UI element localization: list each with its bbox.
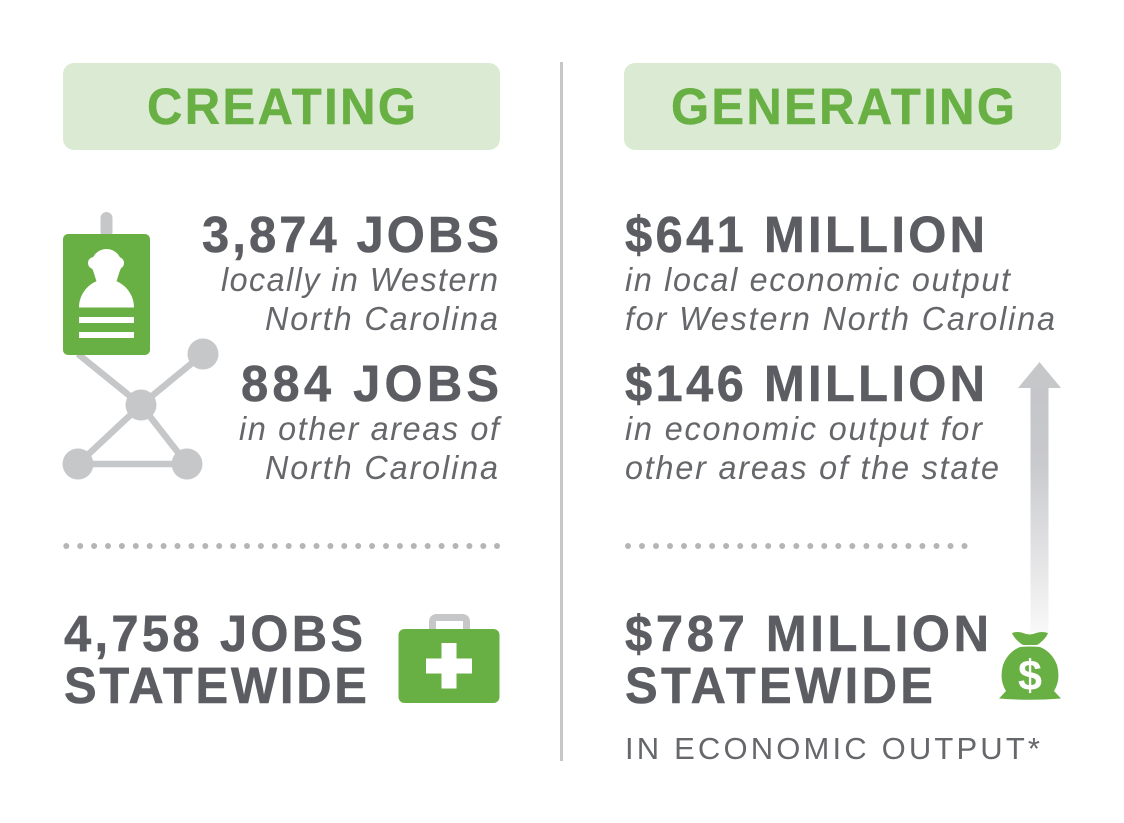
stat: $641 million: in local economic output (625, 261, 1012, 298)
heading: generating: GENERATING (671, 78, 1015, 135)
stat: statewide jobs: 4,758 JOBS (64, 605, 363, 662)
dotted separator (625, 543, 968, 549)
dotted separator (63, 543, 500, 549)
icon: first aid kit (398, 618, 500, 703)
stat: $146 million (625, 355, 999, 486)
icon: money bag: $ (1018, 652, 1042, 700)
icon: id badge (63, 212, 150, 355)
stat: $146 million: in economic output for (625, 410, 983, 447)
stat: statewide jobs (64, 605, 367, 714)
stat: $641 million (625, 206, 1055, 337)
stat: 3,874 jobs: locally in Western (221, 261, 498, 298)
stat: statewide output (625, 605, 1040, 766)
stat: 884 jobs: in other areas of (239, 410, 502, 447)
stat: $641 million: $641 MILLION (625, 206, 985, 263)
stat: 3,874 jobs: North Carolina (265, 300, 498, 337)
stat: statewide output: $787 MILLION (625, 605, 989, 662)
icon: money bag (999, 632, 1061, 700)
arrow: growth (1018, 362, 1061, 632)
stat: $641 million: for Western North Carolina (625, 300, 1055, 337)
stat: 884 jobs: 884 JOBS (241, 355, 499, 412)
stat: 3,874 jobs (202, 206, 499, 337)
panel: generating (624, 63, 1061, 766)
stat: 884 jobs (239, 355, 502, 486)
heading: generating (624, 63, 1061, 150)
stat: statewide output: IN ECONOMIC OUTPUT* (625, 731, 1040, 766)
stat: 3,874 jobs: 3,874 JOBS (202, 206, 499, 263)
stat: statewide output: STATEWIDE (625, 657, 933, 714)
stat: statewide jobs: STATEWIDE (64, 657, 367, 714)
stat: 884 jobs: North Carolina (265, 449, 498, 486)
stat: $146 million: other areas of the state (625, 449, 999, 486)
panel: creating (62, 63, 502, 714)
center divider (560, 62, 563, 761)
heading: creating: CREATING (147, 78, 416, 135)
icon: network (62, 338, 218, 480)
heading: creating (63, 63, 500, 150)
stat: $146 million: $146 MILLION (625, 355, 985, 412)
